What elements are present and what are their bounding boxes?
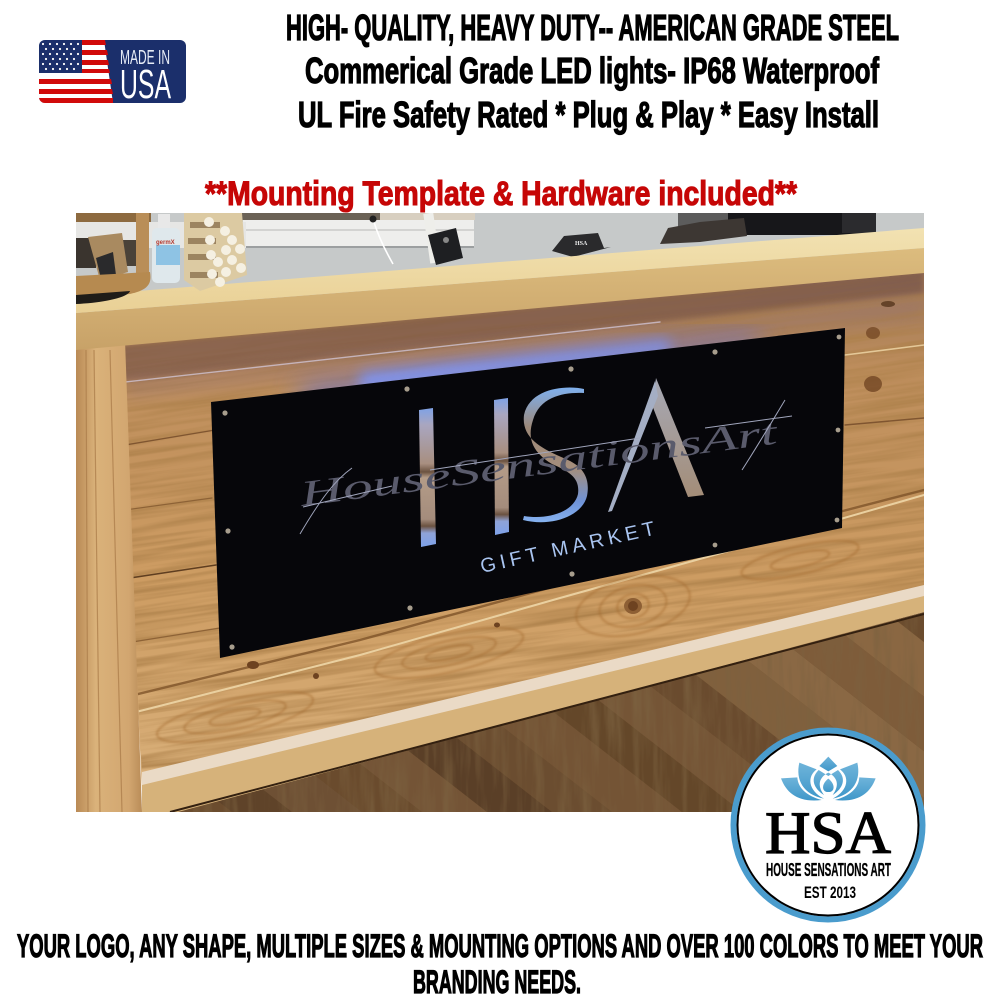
logo badge: House Sensations Art [734,730,922,920]
script lettering: HouseSensationsArt [296,411,781,514]
plank seams and highlights [125,322,924,712]
logo HSA lettering: HSA [765,800,891,866]
heading: mounting template note: **Mounting Template & Hardware included** [205,175,798,213]
left post [76,340,142,812]
badge: made in USA: USA [120,61,171,107]
post shadow lines [86,350,122,812]
cable and card reader [370,213,463,265]
counter accessories: lazy susan [76,213,151,304]
photo: lit sign on wooden counter [76,213,924,812]
badge: made in USA: MADE IN [120,47,170,69]
footer text: branding statement: BRANDING NEEDS. [413,964,581,1000]
badge: made in USA [39,40,186,107]
blue glow above sign [300,332,760,410]
computer equipment on right [660,213,876,244]
cathedral wood grain [153,533,862,753]
wood panel [120,262,924,790]
floor planks [194,620,924,812]
counter top [76,228,924,313]
script flourishes [300,400,792,534]
desk sign stand [552,233,611,257]
logo name: HOUSE SENSATIONS ART [766,860,891,880]
logo established year: EST 2013 [804,883,856,902]
wood knots [247,301,895,679]
shadow below counter [120,270,924,382]
cutout letters HSA [419,378,704,547]
window frame behind counter [76,213,475,248]
baseboard [142,592,924,812]
mounting bolts [222,335,841,650]
footer text: branding statement [17,928,983,1000]
icon: lotus [781,757,876,800]
hand sanitizer bottle: germX [156,240,175,246]
honeycomb rack [184,213,247,291]
desk sign stand: HSA [575,241,588,247]
panel grain [77,232,924,769]
logo outer ring [734,730,922,920]
floor [178,612,924,812]
GIFT MARKET lettering: GIFT MARKET [478,518,657,578]
hand sanitizer bottle [152,214,180,283]
metal sign plate [211,328,845,658]
counter front beam [76,248,924,350]
heading: product features [286,7,899,135]
baseboard highlight [142,585,924,785]
wall background [76,213,924,323]
